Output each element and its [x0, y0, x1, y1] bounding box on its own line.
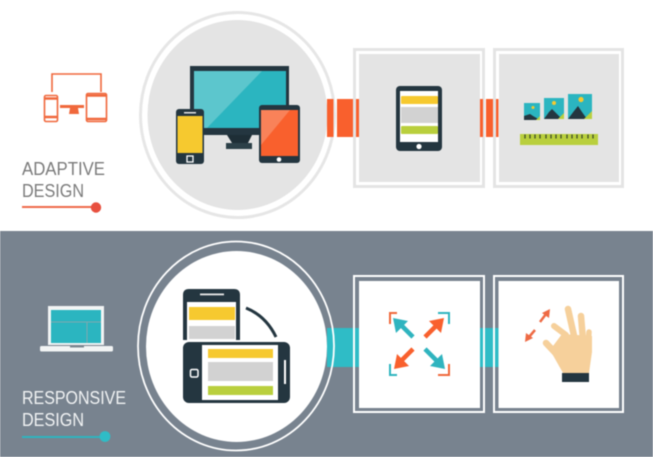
icon: portrait phone	[183, 289, 240, 340]
heading: adaptive design: DESIGN	[22, 181, 84, 201]
icon: pinch arrows	[525, 309, 550, 342]
icon: ruler	[520, 134, 598, 145]
heading: responsive design: DESIGN	[22, 410, 84, 430]
icon: phone	[176, 109, 204, 164]
icon: landscape phone	[183, 342, 290, 403]
heading: adaptive design	[22, 159, 105, 201]
icon: tablet layout	[396, 86, 442, 151]
circle outline	[138, 242, 334, 450]
icon: laptop	[40, 306, 113, 352]
circle: devices	[140, 12, 334, 218]
heading: adaptive design: ADAPTIVE	[22, 159, 105, 179]
heading: responsive design	[22, 388, 126, 430]
connector: circle to arrows box	[327, 328, 359, 367]
connector: arrows box to hand box	[480, 328, 498, 367]
icon: three pictures	[524, 94, 592, 120]
panel: adaptive design	[0, 0, 653, 231]
slider line: responsive	[22, 431, 110, 442]
box: expand arrows	[354, 276, 484, 412]
heading: responsive design: RESPONSIVE	[22, 388, 126, 408]
icon: hand	[546, 309, 592, 382]
slider line: adaptive	[22, 202, 101, 213]
icon: orange outline devices	[44, 74, 106, 122]
connector: tablet box to images box	[480, 99, 498, 137]
icon: wrist band	[562, 373, 589, 382]
icon: orange tablet	[259, 105, 300, 163]
panel: responsive design	[0, 231, 653, 457]
icon: rotation arc	[246, 308, 276, 337]
box: images	[494, 50, 622, 186]
box: pinch hand	[494, 276, 623, 412]
connector: circle to tablet box	[327, 99, 359, 137]
icon: four arrows	[390, 313, 449, 375]
circle: rotating phones	[146, 251, 327, 442]
box: tablet	[354, 50, 484, 186]
icon: monitor	[190, 66, 289, 149]
